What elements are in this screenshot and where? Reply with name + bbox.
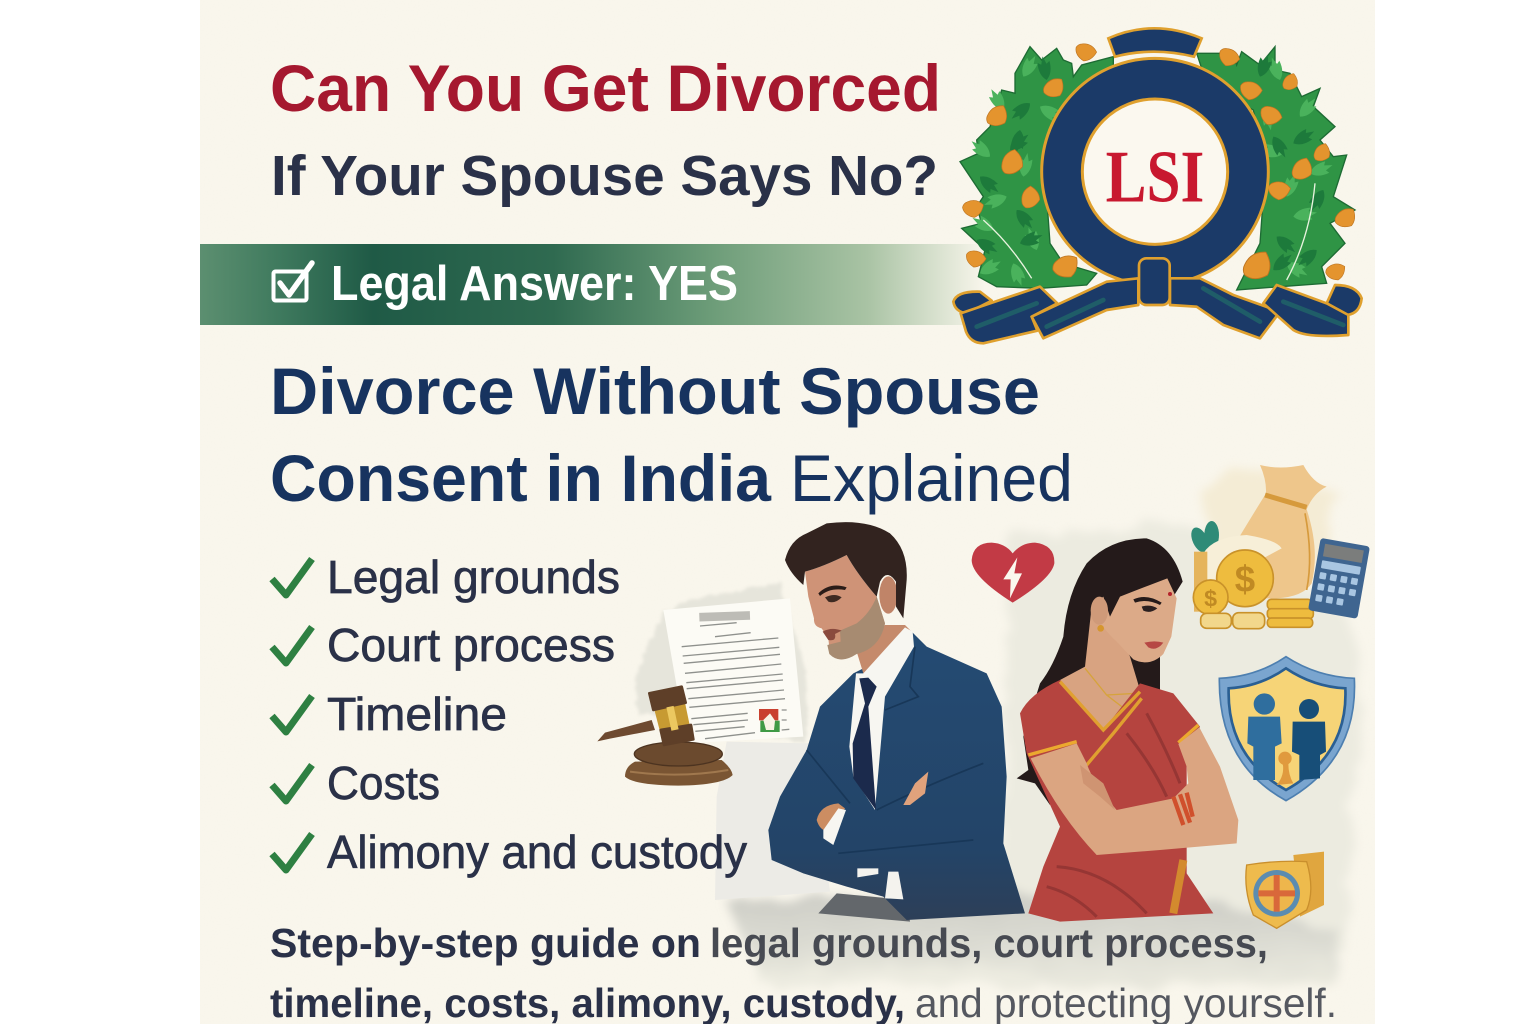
icon: money bag, coins and calculator: $ [1204, 586, 1217, 612]
suit [768, 632, 1025, 920]
hands and cuffs [817, 803, 845, 832]
trousers [818, 893, 910, 922]
title: Can You Get Divorced [270, 51, 941, 125]
icon: family shield [1219, 657, 1355, 801]
banner: legal answer [200, 244, 985, 325]
title [270, 51, 941, 208]
item: court process: Court process [327, 619, 615, 671]
main heading: Explained [790, 441, 1073, 515]
main heading: Divorce Without Spouse [270, 354, 1040, 428]
leaves and cloth [1188, 525, 1212, 555]
neck [857, 625, 912, 692]
page background panel [200, 0, 1375, 1024]
grey wash [635, 582, 807, 743]
woman in saree [1017, 538, 1238, 922]
icon: legal badge [1246, 852, 1324, 928]
item: costs: Costs [327, 757, 440, 809]
document [663, 598, 803, 743]
summary text: legal grounds, court process, [710, 920, 1268, 966]
ear [879, 576, 897, 614]
neck and chest [1060, 607, 1140, 730]
saree [1020, 680, 1213, 922]
checklist [272, 551, 747, 878]
watercolour wash behind illustration [725, 465, 1365, 985]
icon: money bag, coins and calculator [1188, 465, 1370, 629]
tie [853, 678, 877, 810]
gavel [597, 687, 733, 786]
main heading: Consent in India [270, 441, 772, 515]
summary text [270, 920, 1337, 1024]
top cap [1108, 28, 1202, 57]
document and gavel illustration [597, 582, 830, 900]
shirt and collar [849, 627, 914, 810]
face [1092, 578, 1177, 662]
ribbon [953, 258, 1362, 343]
item: costs [272, 757, 440, 809]
arms [1031, 727, 1238, 855]
summary text: Step-by-step guide on [270, 920, 701, 966]
icon: checkbox [274, 263, 312, 300]
icon: broken heart [972, 543, 1054, 603]
hair [1017, 538, 1183, 805]
item: alimony and custody: Alimony and custody [327, 826, 747, 878]
calculator [1308, 538, 1370, 619]
bangles [1173, 793, 1193, 825]
beard [827, 597, 885, 659]
features [818, 585, 847, 596]
coins [1193, 550, 1313, 629]
lapel and arm folds [807, 647, 983, 853]
monogram: LSI [1106, 136, 1204, 218]
title: If Your Spouse Says No? [271, 144, 938, 208]
main heading [270, 354, 1073, 515]
item: legal grounds: Legal grounds [327, 551, 620, 603]
LSI crest logo [953, 28, 1362, 343]
item: timeline: Timeline [327, 688, 507, 740]
orange buds [960, 40, 1358, 283]
hair [785, 522, 907, 618]
navy ring [1042, 58, 1268, 285]
icon: money bag, coins and calculator: $ [1235, 559, 1255, 600]
banner: legal answer: Legal Answer: YES [331, 257, 738, 311]
money bag [1223, 465, 1327, 598]
face [805, 555, 885, 659]
man in suit [768, 522, 1025, 922]
wreath [960, 47, 1355, 290]
box [715, 742, 830, 900]
